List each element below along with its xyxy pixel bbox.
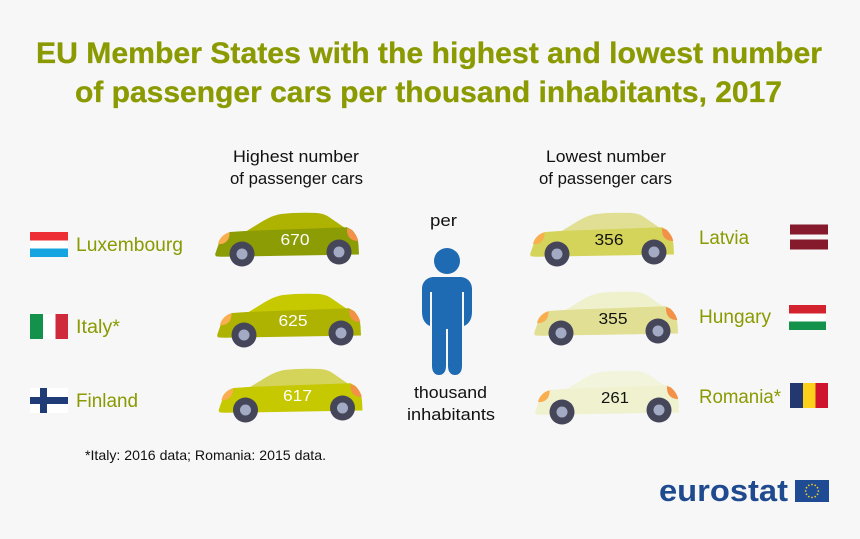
label: Romania: Romania* <box>699 387 782 408</box>
car: Latvia 356: 356 <box>594 232 624 249</box>
car: Luxembourg 670 <box>215 213 359 266</box>
car: Hungary 355 <box>534 292 678 346</box>
person icon <box>422 248 472 375</box>
title <box>36 37 822 109</box>
heading: lowest number <box>539 148 672 188</box>
heading: lowest number: of passenger cars <box>539 170 672 188</box>
title: EU Member States with the highest and lowest number <box>36 37 822 70</box>
car: Italy 625 <box>217 294 361 348</box>
heading: highest number <box>230 148 363 188</box>
car: Finland 617 <box>219 369 362 422</box>
car: Finland 617: 617 <box>283 388 312 405</box>
label: thousand inhabitants <box>407 384 495 424</box>
logo: eurostat: eurostat <box>659 473 788 508</box>
label: thousand inhabitants: thousand <box>414 384 487 402</box>
flag: Italy <box>30 314 68 339</box>
car: Latvia 356 <box>530 213 674 266</box>
label: Italy: Italy* <box>76 317 121 338</box>
label: Finland: Finland <box>76 391 138 412</box>
heading: lowest number: Lowest number <box>546 148 667 166</box>
car: Hungary 355: 355 <box>598 311 628 328</box>
flag: Latvia <box>790 224 828 250</box>
heading: highest number: of passenger cars <box>230 170 363 188</box>
flag: Luxembourg <box>30 232 68 257</box>
label: per: per <box>430 212 458 230</box>
flag: Hungary <box>789 305 826 330</box>
label: Luxembourg: Luxembourg <box>76 235 183 256</box>
car: Italy 625: 625 <box>278 313 308 330</box>
label: thousand inhabitants: inhabitants <box>407 406 495 424</box>
footnote: *Italy: 2016 data; Romania: 2015 data. <box>85 447 326 463</box>
car: Romania 261: 261 <box>601 390 629 407</box>
car: Luxembourg 670: 670 <box>280 232 310 249</box>
flag: Finland <box>30 388 68 413</box>
icon: EU flag <box>795 480 829 502</box>
label: Latvia: Latvia <box>699 228 749 249</box>
title: of passenger cars per thousand inhabitants, 2017 <box>75 76 782 109</box>
heading: highest number: Highest number <box>233 148 360 166</box>
flag: Romania <box>790 383 828 408</box>
car: Romania 261 <box>535 371 679 424</box>
label: Hungary: Hungary <box>699 307 771 328</box>
